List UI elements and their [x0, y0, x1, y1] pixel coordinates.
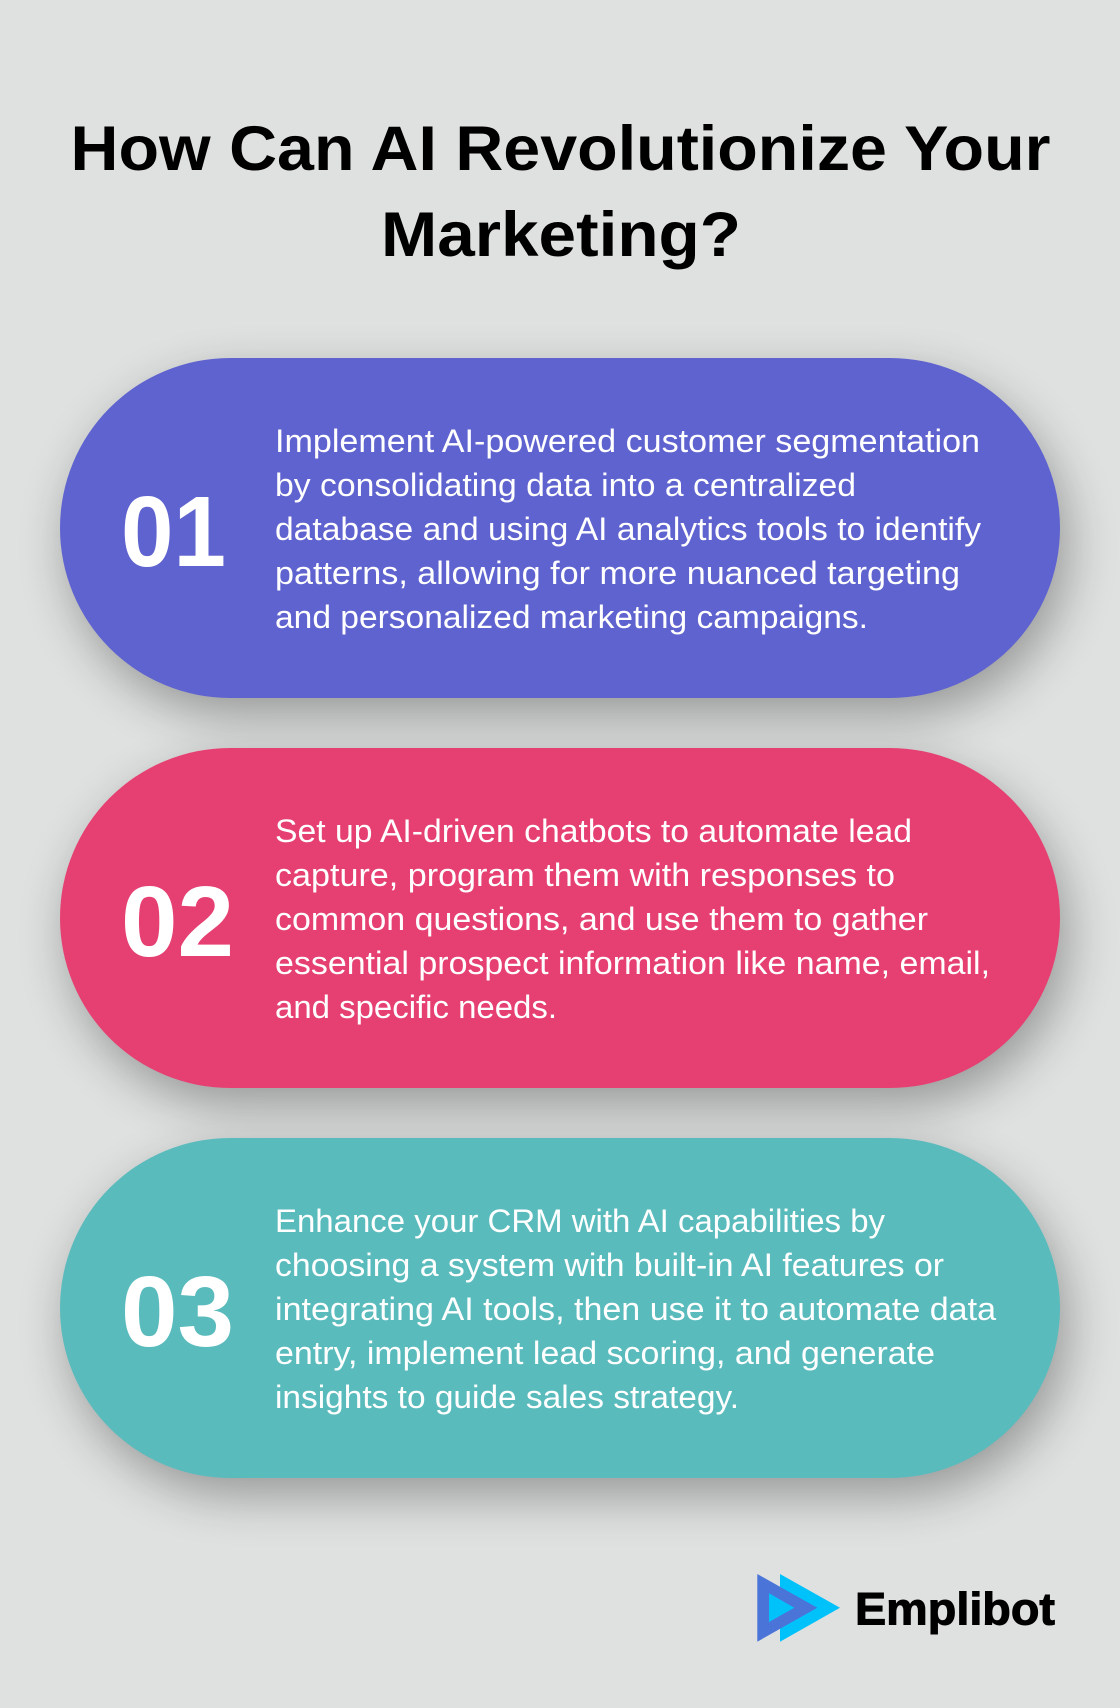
title: Marketing?	[381, 200, 741, 270]
number 03: 03	[121, 1256, 234, 1368]
panel: step 3 pill	[60, 1138, 1060, 1478]
logo: Emplibot	[757, 1574, 1055, 1642]
text block: step 3: entry, implement lead scoring, and generate	[275, 1335, 935, 1371]
text block: step 1: patterns, allowing for more nuanced targeting	[275, 555, 960, 591]
text block: step 3: choosing a system with built-in AI features or	[275, 1247, 944, 1283]
text block: step 1: by consolidating data into a centralized	[275, 467, 856, 503]
text block: step 1: database and using AI analytics tools to identify	[275, 511, 981, 547]
text block: step 1: Implement AI-powered customer segmentation	[275, 423, 980, 459]
text block: step 2	[275, 813, 990, 1025]
text block: step 1: and personalized marketing campaigns.	[275, 599, 868, 635]
text block: step 3: Enhance your CRM with AI capabilities by	[275, 1203, 885, 1239]
title: How Can AI Revolutionize Your	[70, 114, 1050, 184]
text block: step 3: integrating AI tools, then use it to automate data	[275, 1291, 996, 1327]
text block: step 3: insights to guide sales strategy.	[275, 1379, 739, 1415]
icon: play triangles	[757, 1574, 840, 1642]
text block: step 2: common questions, and use them to gather	[275, 901, 928, 937]
number 01: 01	[121, 476, 226, 588]
title	[70, 114, 1050, 270]
panel: step 2 pill	[60, 748, 1060, 1088]
text block: step 2: and specific needs.	[275, 989, 557, 1025]
panel: step 1 pill	[60, 358, 1060, 698]
text block: step 2: essential prospect information like name, email,	[275, 945, 990, 981]
text block: step 1	[275, 423, 981, 635]
number 02: 02	[121, 866, 234, 978]
wordmark: Emplibot	[855, 1583, 1055, 1634]
text block: step 2: capture, program them with responses to	[275, 857, 895, 893]
text block: step 2: Set up AI-driven chatbots to automate lead	[275, 813, 912, 849]
text block: step 3	[275, 1203, 996, 1415]
